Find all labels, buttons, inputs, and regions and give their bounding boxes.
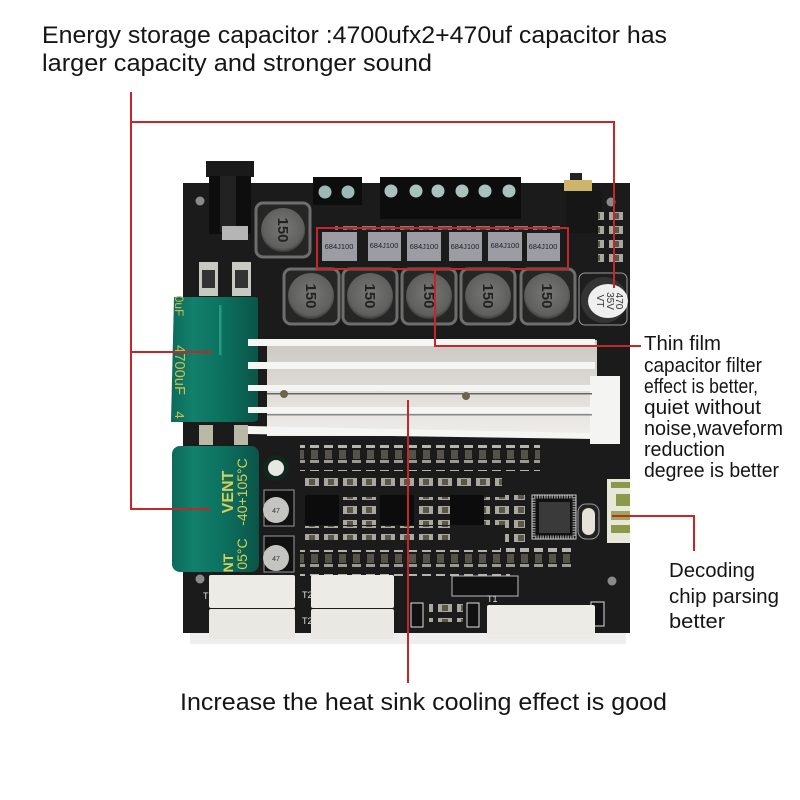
icon: 4700uF capacitor upper: 4: [172, 411, 187, 419]
resistors left: [199, 262, 251, 445]
white connectors: T1: [487, 594, 498, 604]
label: film capacitor: reduction: [644, 438, 725, 461]
icon: headphone jack: [564, 173, 602, 233]
amplifier circuit board: [171, 161, 630, 644]
label: film capacitor: noise,waveform: [644, 417, 783, 440]
callout: film capacitor box: [317, 228, 641, 346]
icon: 4700uF capacitor upper: 0uF: [172, 296, 186, 316]
film capacitors: 684J100: [451, 242, 479, 251]
film capacitors: 684J100: [529, 242, 557, 251]
icon: 470uF capacitor: 470: [613, 293, 624, 310]
label: film capacitor: effect is better,: [644, 375, 758, 398]
icon: 4700uF capacitor upper: [171, 296, 258, 422]
film capacitors: 684J100: [410, 242, 438, 251]
row of inductors: 150: [302, 283, 319, 309]
icon: 470uF capacitor: VT: [594, 295, 605, 307]
PCB: [183, 183, 630, 633]
label: decoding chip: Decoding: [669, 559, 755, 582]
parts near connectors: [411, 602, 604, 627]
icon: screw terminals right: [380, 177, 521, 219]
title: larger capacity and stronger sound: [42, 50, 432, 77]
row of inductors: 150: [479, 283, 496, 309]
icon: 4700uF capacitor lower: [172, 446, 259, 572]
icon: 4700uF capacitor lower: VENT: [220, 470, 237, 513]
small parts above film capacitors: [335, 222, 560, 230]
label: film capacitor: degree is better: [644, 459, 779, 482]
icon: 470uF capacitor: [579, 273, 628, 325]
icon: 4700uF capacitor upper: 4700uF: [171, 345, 188, 395]
label: decoding chip: better: [669, 610, 725, 633]
label: film capacitor: [644, 332, 783, 482]
row of inductors: [284, 269, 575, 324]
small electrolytic capacitors: 47: [272, 556, 280, 563]
icon: crystal: [578, 504, 599, 539]
film capacitors: 684J100: [370, 241, 398, 250]
icon: screw terminals left: [313, 177, 362, 205]
icon: inductor top left: 150: [274, 217, 291, 243]
row of inductors: 150: [538, 283, 555, 309]
label: decoding chip: [669, 559, 779, 633]
label: film capacitor: quiet without: [644, 396, 761, 419]
icon: bluetooth antenna: [607, 479, 630, 543]
icon: 4700uF capacitor lower: NT: [220, 553, 236, 572]
heat sink: [248, 339, 620, 444]
label: film capacitor: capacitor filter: [644, 354, 762, 377]
title: Energy storage capacitor :4700ufx2+470uf capacitor has: [42, 22, 667, 49]
small electrolytic capacitors: 47: [272, 508, 280, 515]
icon: decoding chip: [532, 495, 576, 539]
label: film capacitor: Thin film: [644, 332, 721, 355]
film capacitors: 684J100: [491, 241, 519, 250]
film capacitors: [322, 232, 560, 261]
icon: 4700uF capacitor lower: 05°C: [234, 538, 250, 570]
film capacitors: 684J100: [325, 242, 353, 251]
icon: DC power jack: [206, 161, 254, 240]
title: [42, 22, 667, 77]
callout lines: [131, 92, 694, 683]
row of inductors: 150: [420, 283, 437, 309]
white connectors: T: [203, 591, 209, 601]
small electrolytic capacitors: [263, 455, 294, 572]
callout: decoding chip: [612, 516, 694, 551]
small parts near jack: [598, 210, 626, 262]
icon: 4700uF capacitor lower: -40+105°C: [234, 458, 250, 526]
board shadow: [190, 632, 626, 644]
surface mount parts: [300, 445, 575, 596]
row of inductors: 150: [361, 283, 378, 309]
icon: inductor top left: [256, 203, 310, 257]
white connectors: T2: [302, 616, 313, 626]
label: heat sink: Increase the heat sink cooling effect is good: [180, 689, 667, 716]
icon: 470uF capacitor: 35V: [604, 292, 615, 310]
white connectors: T2: [302, 590, 313, 600]
label: decoding chip: chip parsing: [669, 585, 779, 608]
callout: heat sink: [407, 400, 409, 683]
callout: energy storage capacitors: [131, 92, 614, 509]
white connectors: [203, 575, 595, 639]
